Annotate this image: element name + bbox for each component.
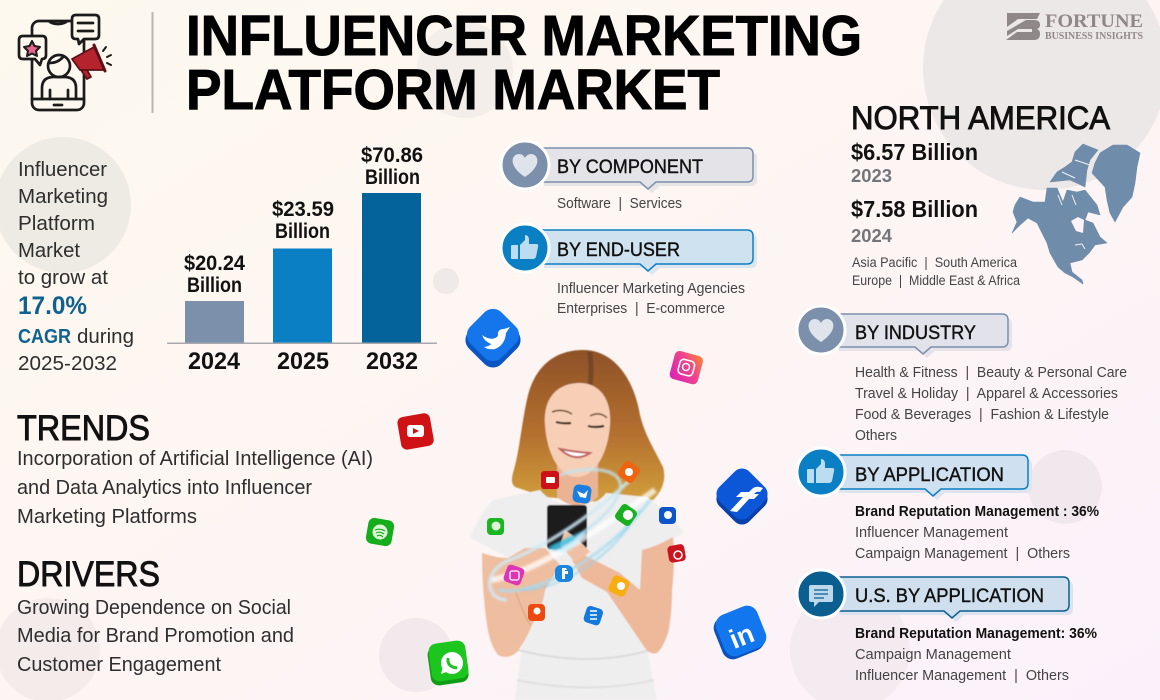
panel: by end-user: Enterprises | E-commerce <box>557 301 725 317</box>
bar 2032: $70.86 <box>361 144 423 167</box>
bar 2032: Billion <box>365 166 420 189</box>
icon: WhatsApp tile <box>427 640 470 686</box>
text block: market growth: Influencer <box>18 158 107 181</box>
panel: U.S. by application: U.S. BY APPLICATION <box>855 585 1044 607</box>
left arm <box>482 548 560 657</box>
panel: by industry: Food & Beverages | Fashion & Lifestyle <box>855 407 1109 423</box>
icon: Facebook tile <box>712 464 772 529</box>
panel: by component: BY COMPONENT <box>557 156 703 178</box>
icons: small social tiles around phone <box>487 459 686 626</box>
text block: market growth: Platform <box>18 212 95 235</box>
panel: by industry: Health & Fitness | Beauty & Personal Care <box>855 365 1127 381</box>
neck <box>557 462 598 506</box>
panel: by industry <box>797 306 1127 444</box>
text block: market growth: Marketing <box>18 185 108 208</box>
icon: YouTube tile <box>396 412 435 451</box>
region: North America <box>851 100 1140 288</box>
region: North America: Europe | Middle East & Africa <box>852 273 1020 288</box>
drivers block: Customer Engagement <box>17 653 221 676</box>
header divider <box>152 12 154 113</box>
text block: market growth: to grow at <box>18 266 108 289</box>
light swirl <box>490 470 655 600</box>
title: INFLUENCER MARKETING <box>186 4 862 68</box>
region: North America: 2024 <box>851 226 892 246</box>
bar 2024 <box>184 252 245 375</box>
drivers block: DRIVERS <box>17 555 160 594</box>
panel: by end-user: Influencer Marketing Agencies <box>557 281 745 297</box>
panel: by industry: BY INDUSTRY <box>855 322 976 344</box>
title: PLATFORM MARKET <box>186 58 720 122</box>
icon: LinkedIn tile: in <box>725 618 758 655</box>
region: North America: $7.58 Billion <box>851 196 978 222</box>
bar 2025: Billion <box>275 220 330 243</box>
panel: U.S. by application: Influencer Management | Others <box>855 668 1069 684</box>
region: North America: NORTH AMERICA <box>851 100 1111 136</box>
illustration: woman using phone <box>470 350 684 700</box>
logo: Fortune Business Insights <box>1006 11 1143 42</box>
panel: U.S. by application: Campaign Management <box>855 647 1011 663</box>
text block: market growth <box>18 158 134 375</box>
t-shirt <box>470 490 684 700</box>
icon: Spotify tile <box>365 517 395 547</box>
trends block: TRENDS <box>17 409 150 448</box>
text block: market growth: Market <box>18 239 80 262</box>
icon: Instagram tile <box>669 350 704 385</box>
panel: by component <box>501 141 757 212</box>
drivers block: Growing Dependence on Social <box>17 596 291 619</box>
panel: by industry: Others <box>855 428 897 444</box>
icon: LinkedIn tile <box>710 602 770 663</box>
panel: by application: Campaign Management | Others <box>855 546 1070 562</box>
bar 2025: $23.59 <box>272 198 334 221</box>
trends block <box>17 409 373 528</box>
text block: market growth: 17.0% <box>18 292 87 320</box>
hair <box>512 350 664 503</box>
bar 2024: $20.24 <box>184 252 245 275</box>
panel: U.S. by application: Brand Reputation Management: 36% <box>855 626 1097 642</box>
panel: by application: Influencer Management <box>855 525 1008 541</box>
logo: Fortune Business Insights: BUSINESS INSIGHTS <box>1045 31 1143 42</box>
bar 2024: Billion <box>187 274 242 297</box>
trends block: Marketing Platforms <box>17 505 197 528</box>
trends block: and Data Analytics into Influencer <box>17 476 312 499</box>
logo: Fortune Business Insights: FORTUNE <box>1045 11 1143 32</box>
text block: market growth: CAGR <box>18 325 71 348</box>
bar 2025: 2025 <box>277 348 329 375</box>
panel: by component: Software | Services <box>557 196 682 212</box>
panel: by application: Brand Reputation Management : 36% <box>855 504 1099 520</box>
bar chart: market size <box>167 144 437 375</box>
panel: by end-user <box>501 224 757 317</box>
text block: market growth: during <box>77 325 134 348</box>
map: North America <box>1012 144 1140 284</box>
right arm <box>572 537 674 653</box>
panel: by end-user: BY END-USER <box>557 239 680 261</box>
panel: by industry: Travel & Holiday | Apparel & Accessories <box>855 386 1118 402</box>
phone <box>547 505 587 549</box>
region: North America: $6.57 Billion <box>851 139 978 165</box>
text block: market growth: 2025-2032 <box>18 352 117 375</box>
panel: by application <box>797 448 1099 562</box>
icon: influencer phone with megaphone <box>19 15 111 110</box>
region: North America: Asia Pacific | South America <box>852 255 1017 270</box>
face <box>545 383 610 477</box>
panel: by application: BY APPLICATION <box>855 464 1004 486</box>
bar 2032 <box>361 144 423 375</box>
bar 2032: 2032 <box>366 348 418 375</box>
drivers block <box>17 555 294 676</box>
icon: Twitter tile <box>460 304 526 373</box>
trends block: Incorporation of Artificial Intelligence (AI) <box>17 447 373 470</box>
bar 2025 <box>272 198 334 375</box>
bar 2024: 2024 <box>188 348 241 375</box>
drivers block: Media for Brand Promotion and <box>17 624 294 647</box>
panel: U.S. by application <box>797 570 1097 684</box>
title <box>186 4 862 122</box>
region: North America: 2023 <box>851 166 892 186</box>
